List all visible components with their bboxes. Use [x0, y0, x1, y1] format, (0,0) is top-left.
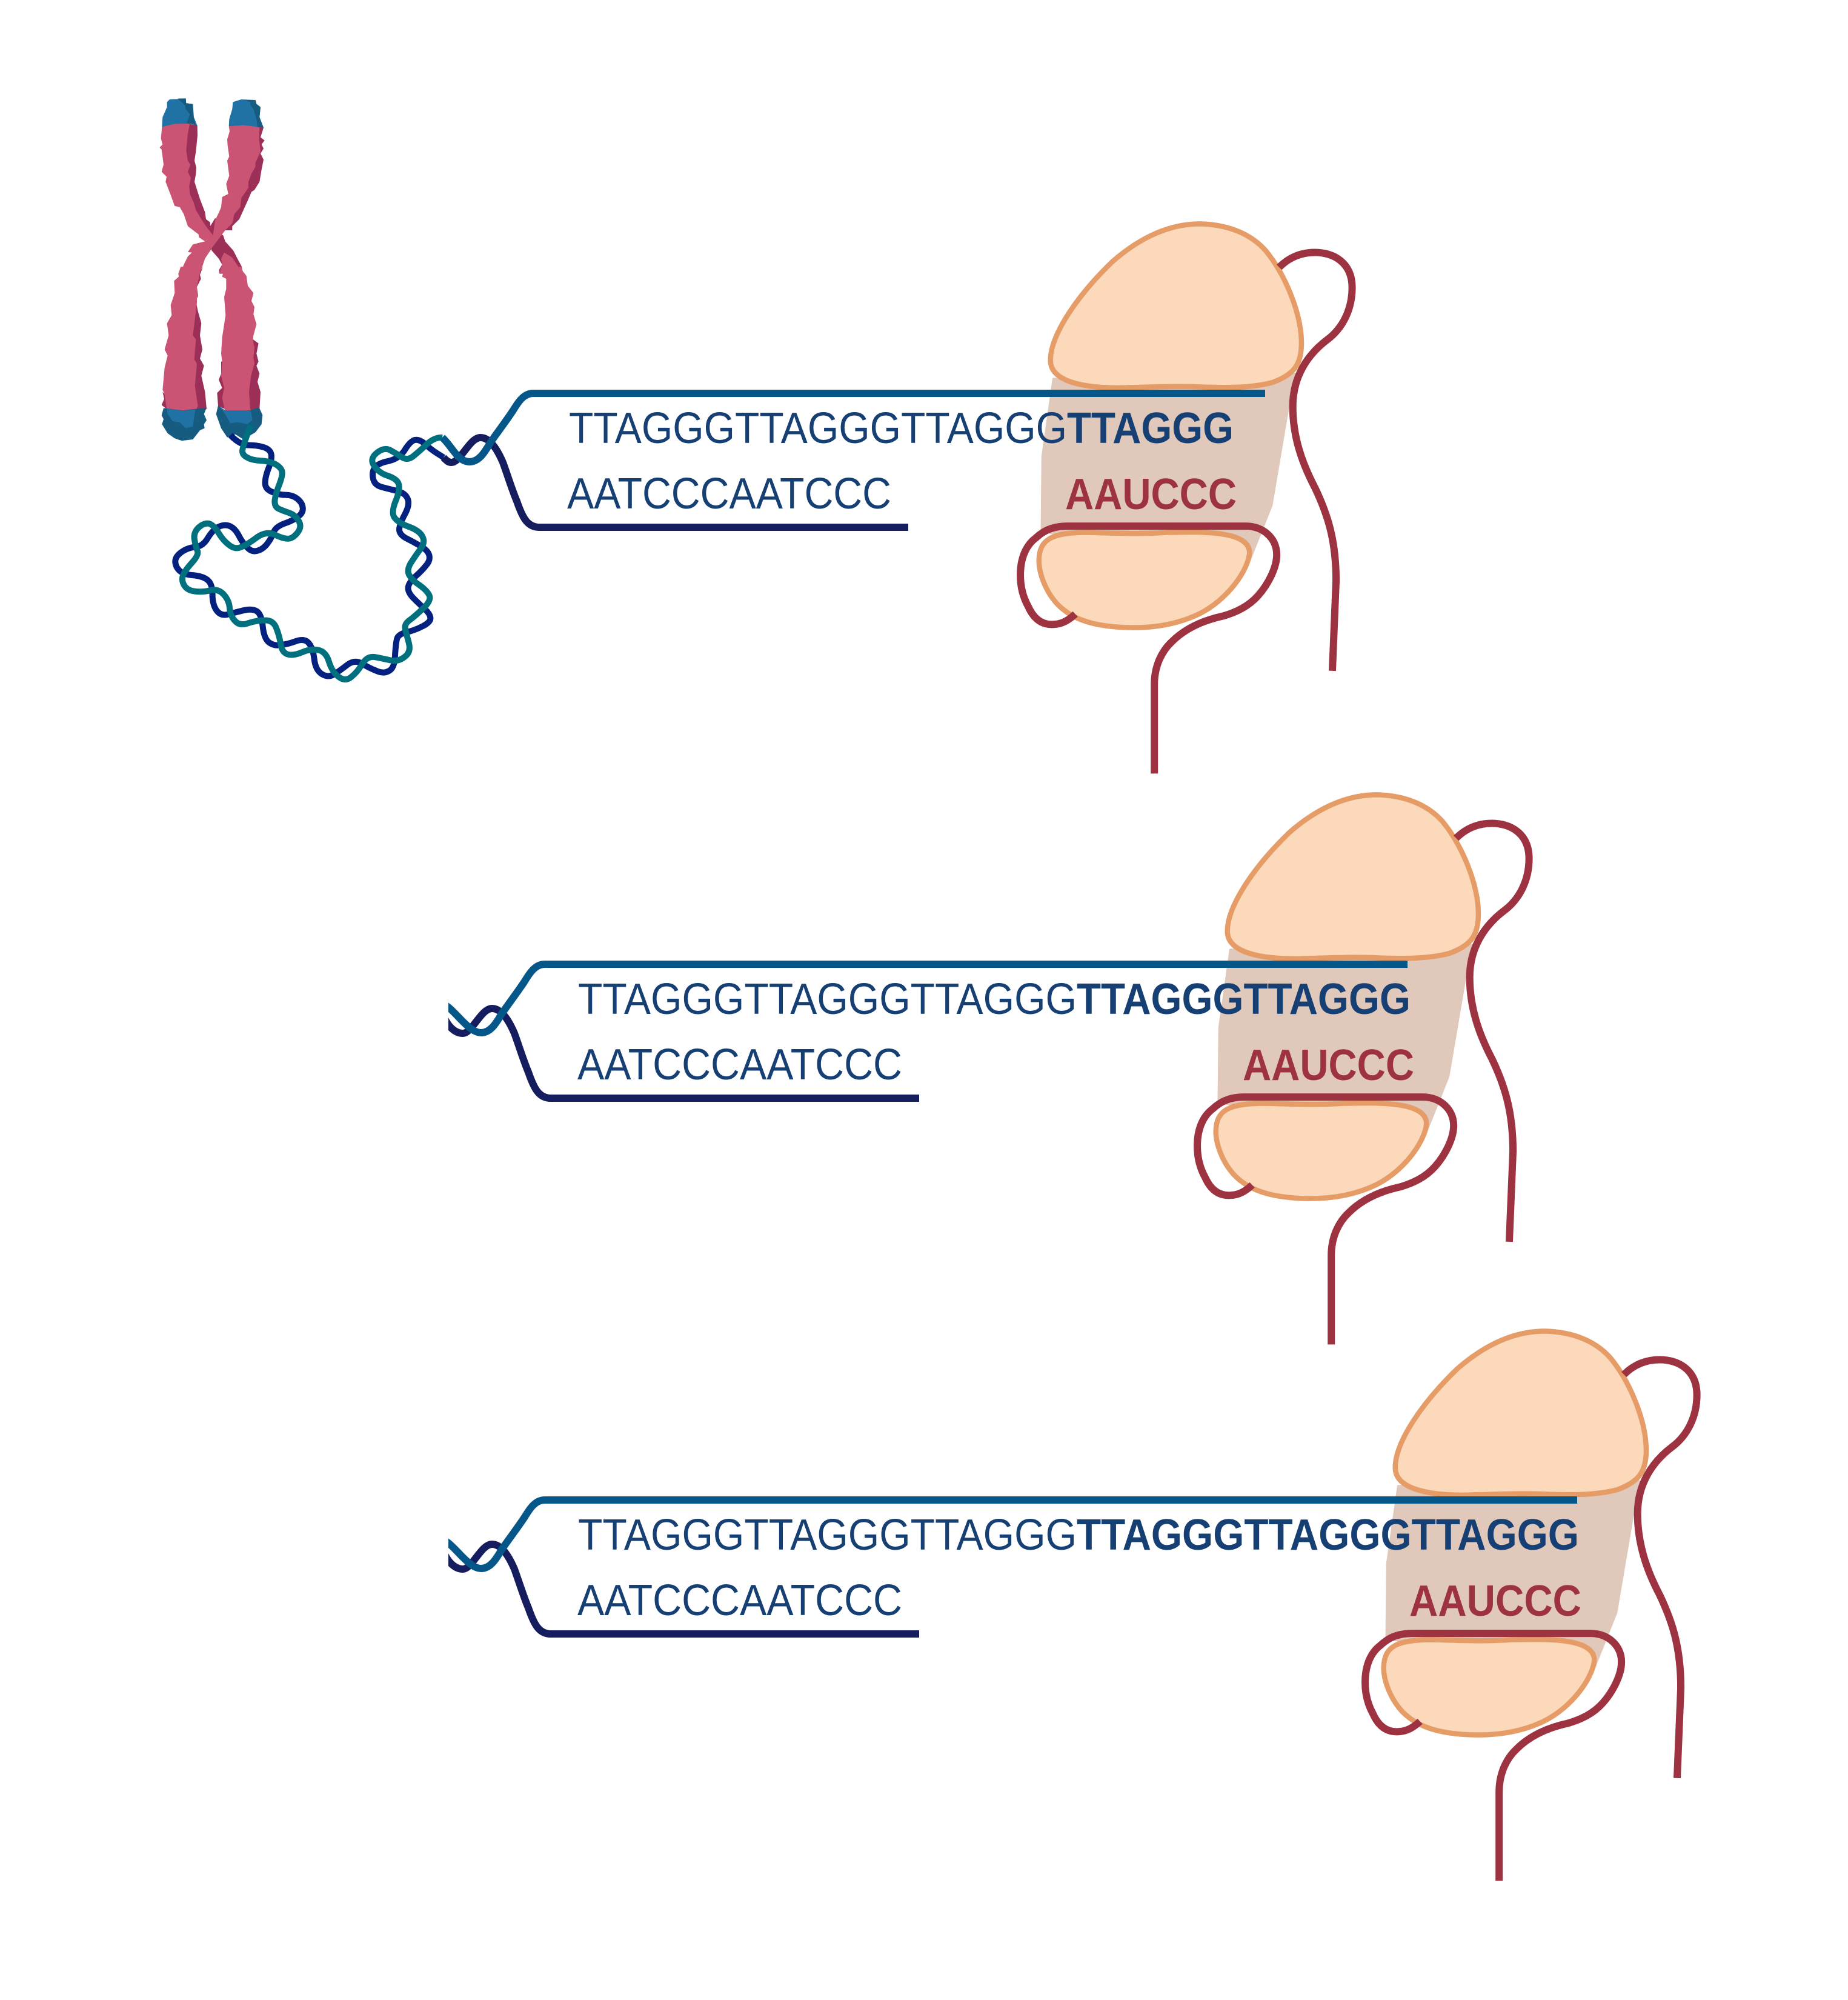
sequence text, step 3 — [577, 1511, 1581, 1625]
RNA lower loop — [1020, 526, 1277, 773]
bottom strand — [442, 1008, 919, 1098]
RNA template: AAUCCC — [1065, 470, 1237, 519]
ribosome-like telomerase, position 2 — [1197, 795, 1529, 1344]
telomere cap bottom right — [219, 406, 253, 424]
teal strand — [182, 425, 442, 679]
ribosome-like telomerase, position 3 — [1365, 1331, 1697, 1881]
telomere cap top right — [229, 99, 264, 128]
added repeat: TTAGGG — [1067, 404, 1234, 453]
added repeats: TTAGGGTTAGGG — [1077, 975, 1411, 1024]
RNA upper strand — [1456, 823, 1529, 1242]
large lobe — [1051, 224, 1301, 388]
RNA template: AAUCCC — [1409, 1577, 1581, 1625]
back chromatid dark side — [185, 123, 243, 274]
RNA lower loop — [1365, 1633, 1621, 1881]
bottom strand — [444, 438, 908, 527]
shaded active site — [1218, 944, 1474, 1133]
top strand — [442, 393, 1265, 462]
telomere cap bottom left — [167, 408, 195, 428]
small lobe — [1216, 1103, 1426, 1199]
navy strand — [175, 435, 444, 676]
DNA double helix coil — [175, 425, 444, 679]
upper right dark edge — [209, 126, 265, 236]
lower right arm — [220, 267, 256, 412]
lower left arm — [162, 267, 201, 412]
upper left arm — [159, 123, 213, 241]
bottom strand — [442, 1544, 919, 1634]
icon: chromosome with telomere caps — [159, 98, 265, 441]
lower right arm start — [219, 253, 243, 274]
front chromatid — [180, 125, 261, 274]
large lobe — [1228, 795, 1478, 959]
chromosome lower half — [162, 267, 262, 441]
complementary strand: AATCCCAATCCC — [577, 1576, 902, 1625]
shaded active site — [1386, 1480, 1641, 1670]
telomere cap top left — [162, 98, 198, 127]
RNA lower loop — [1197, 1097, 1454, 1344]
telomere cap bottom right shade — [216, 405, 262, 439]
telomere cap top right shade — [244, 100, 264, 128]
RNA upper strand — [1624, 1360, 1697, 1778]
ribosome-like telomerase, position 1 — [1020, 224, 1352, 773]
RNA upper strand — [1279, 252, 1352, 671]
RNA template: AAUCCC — [1243, 1041, 1414, 1090]
small lobe — [1039, 532, 1249, 628]
lower right inner dark edge — [217, 362, 225, 409]
large lobe — [1395, 1331, 1646, 1495]
small lobe — [1384, 1639, 1594, 1735]
top strand — [439, 1500, 1577, 1568]
top strand — [439, 964, 1408, 1033]
shaded active site — [1041, 373, 1297, 562]
telomere fork, step 1 — [442, 393, 1265, 527]
template strand repeats: TTAGGGTTAGGGTTAGGG — [578, 975, 1077, 1024]
lower right dark edges — [244, 339, 261, 410]
telomere fork, step 2 — [439, 964, 1408, 1098]
complementary strand: AATCCCAATCCC — [567, 470, 891, 518]
chromosome upper half — [159, 98, 265, 274]
lower left outer dark fleck — [162, 392, 167, 409]
lower left dark edge — [191, 267, 207, 410]
template strand repeats: TTAGGGTTAGGGTTAGGG — [578, 1511, 1077, 1559]
template strand repeats: TTAGGGTTAGGGTTAGGG — [569, 404, 1067, 453]
telomere cap top left shade — [178, 98, 196, 125]
sequence text, step 1 — [567, 404, 1237, 519]
telomere fork, step 3 — [439, 1500, 1577, 1634]
telomere cap bottom left shade — [162, 408, 207, 441]
added repeats: TTAGGGTTAGGGTTAGGG — [1077, 1511, 1579, 1559]
sequence text, step 2 — [577, 975, 1414, 1090]
complementary strand: AATCCCAATCCC — [577, 1041, 902, 1089]
